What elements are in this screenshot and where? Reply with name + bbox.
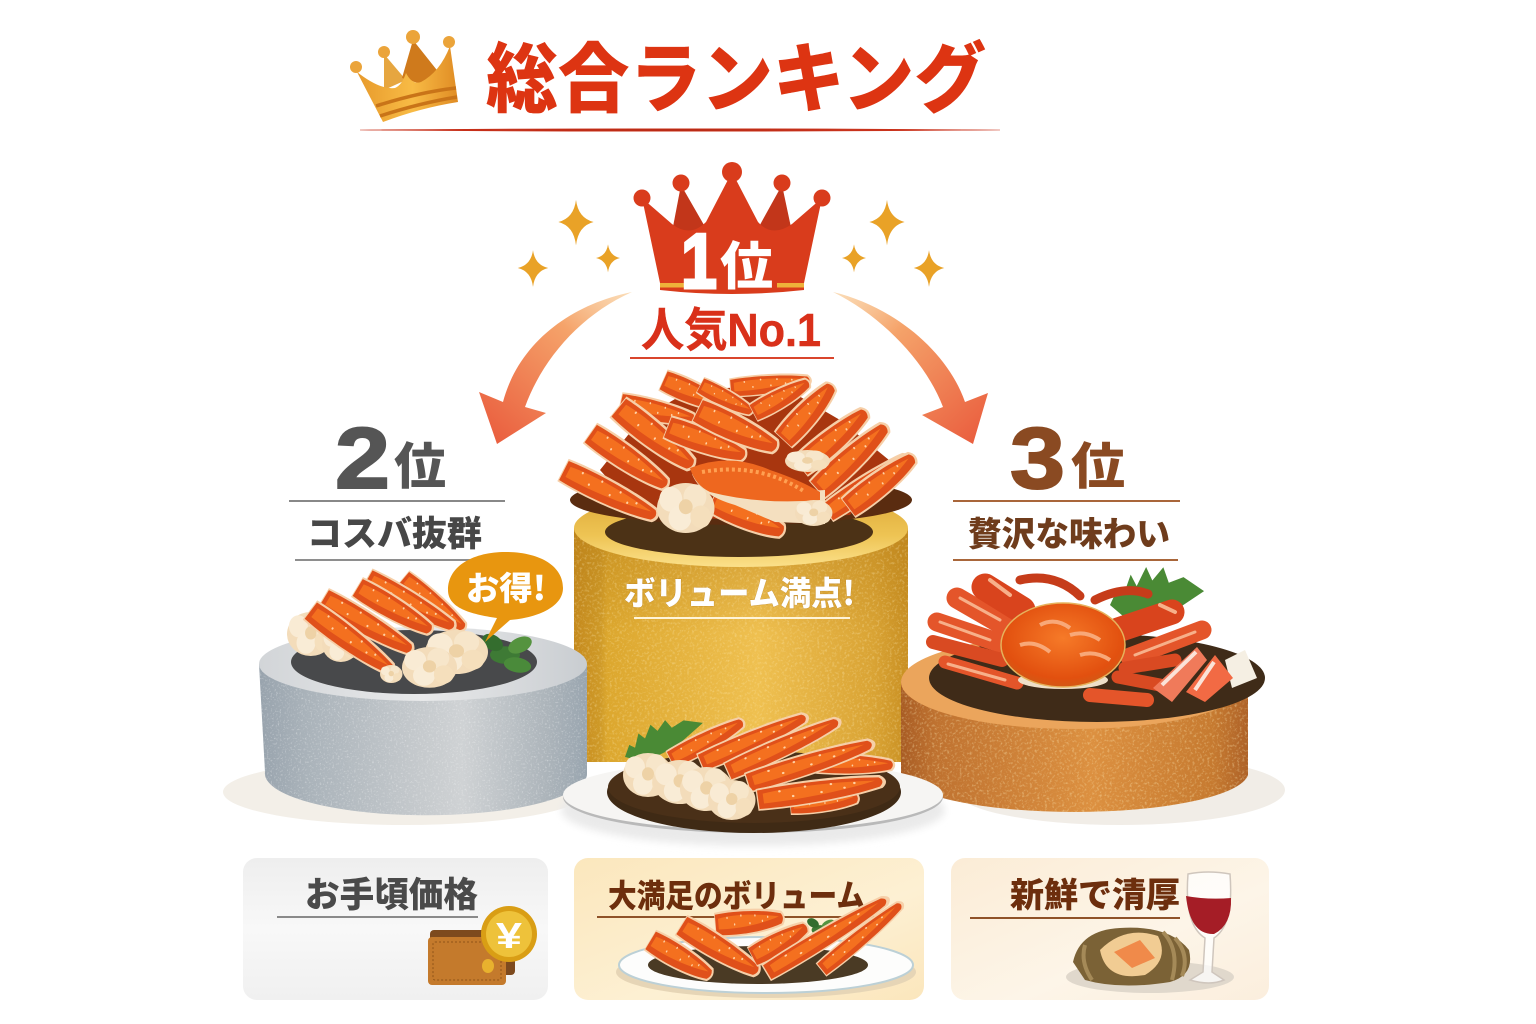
card label: 大満足のボリューム: [608, 871, 865, 917]
rank number 2位: 2: [335, 411, 390, 507]
sliced crab meat and tofu: [1153, 647, 1257, 702]
card: fresh and rich: [951, 858, 1269, 1000]
second place heading: 位: [394, 427, 446, 499]
plate of crab legs: [616, 889, 916, 998]
rank number 1位: 1: [681, 217, 717, 305]
icon: wine glass: [1186, 872, 1231, 983]
claws: [985, 587, 1022, 610]
card: affordable price: [243, 858, 548, 1000]
speech bubble: お得!: [448, 552, 563, 642]
front plate of crab legs: [561, 706, 945, 846]
card: satisfying volume: [574, 858, 924, 1000]
podium: bronze third place: [901, 561, 1265, 816]
icon: red crown: 位: [720, 225, 773, 300]
label underline: [630, 357, 834, 359]
card label: 新鮮で清厚: [1010, 868, 1180, 917]
shiso leaf: [1106, 561, 1207, 625]
first place badge: [518, 162, 944, 359]
plate of crab legs on gold podium: [557, 368, 924, 557]
third place heading: 位: [1071, 427, 1125, 499]
heading underline: [360, 129, 1000, 131]
text: ボリューム満点!: ボリューム満点!: [624, 567, 855, 615]
podium: silver second place: [259, 552, 587, 820]
sparkles: [518, 200, 944, 287]
oyster on shadow: [1066, 928, 1234, 993]
arrow: to third place: [833, 292, 988, 444]
card label: お手頃価格: [305, 867, 478, 918]
whole crab: [933, 578, 1202, 700]
ground shadows: [223, 755, 1285, 825]
label: 人気No.1: 人気No.1: [641, 304, 821, 356]
third place heading: [953, 411, 1180, 561]
pile shadow mass: [600, 385, 895, 520]
title: ranking heading: [350, 18, 1000, 131]
heading text: 総合ランキング: [486, 18, 986, 128]
icon: wallet and yen coin: ¥: [496, 915, 522, 956]
dark plate: [929, 634, 1265, 722]
speech bubble: お得!: お得!: [466, 562, 546, 610]
icon: wallet and yen coin: [428, 906, 537, 985]
second place heading: [289, 411, 505, 561]
tagline: コスバ抜群: [307, 506, 482, 557]
icon: gold crown: [350, 30, 458, 122]
crab legs: [287, 567, 534, 688]
dark plate: [291, 630, 537, 694]
icon: red crown: [634, 162, 830, 305]
rank number 3位: 3: [1010, 411, 1065, 507]
arrow: to second place: [479, 292, 632, 444]
large front leg: [690, 460, 825, 524]
podium: gold first place: [574, 489, 908, 762]
tagline: 贅沢な味わい: [968, 507, 1170, 556]
